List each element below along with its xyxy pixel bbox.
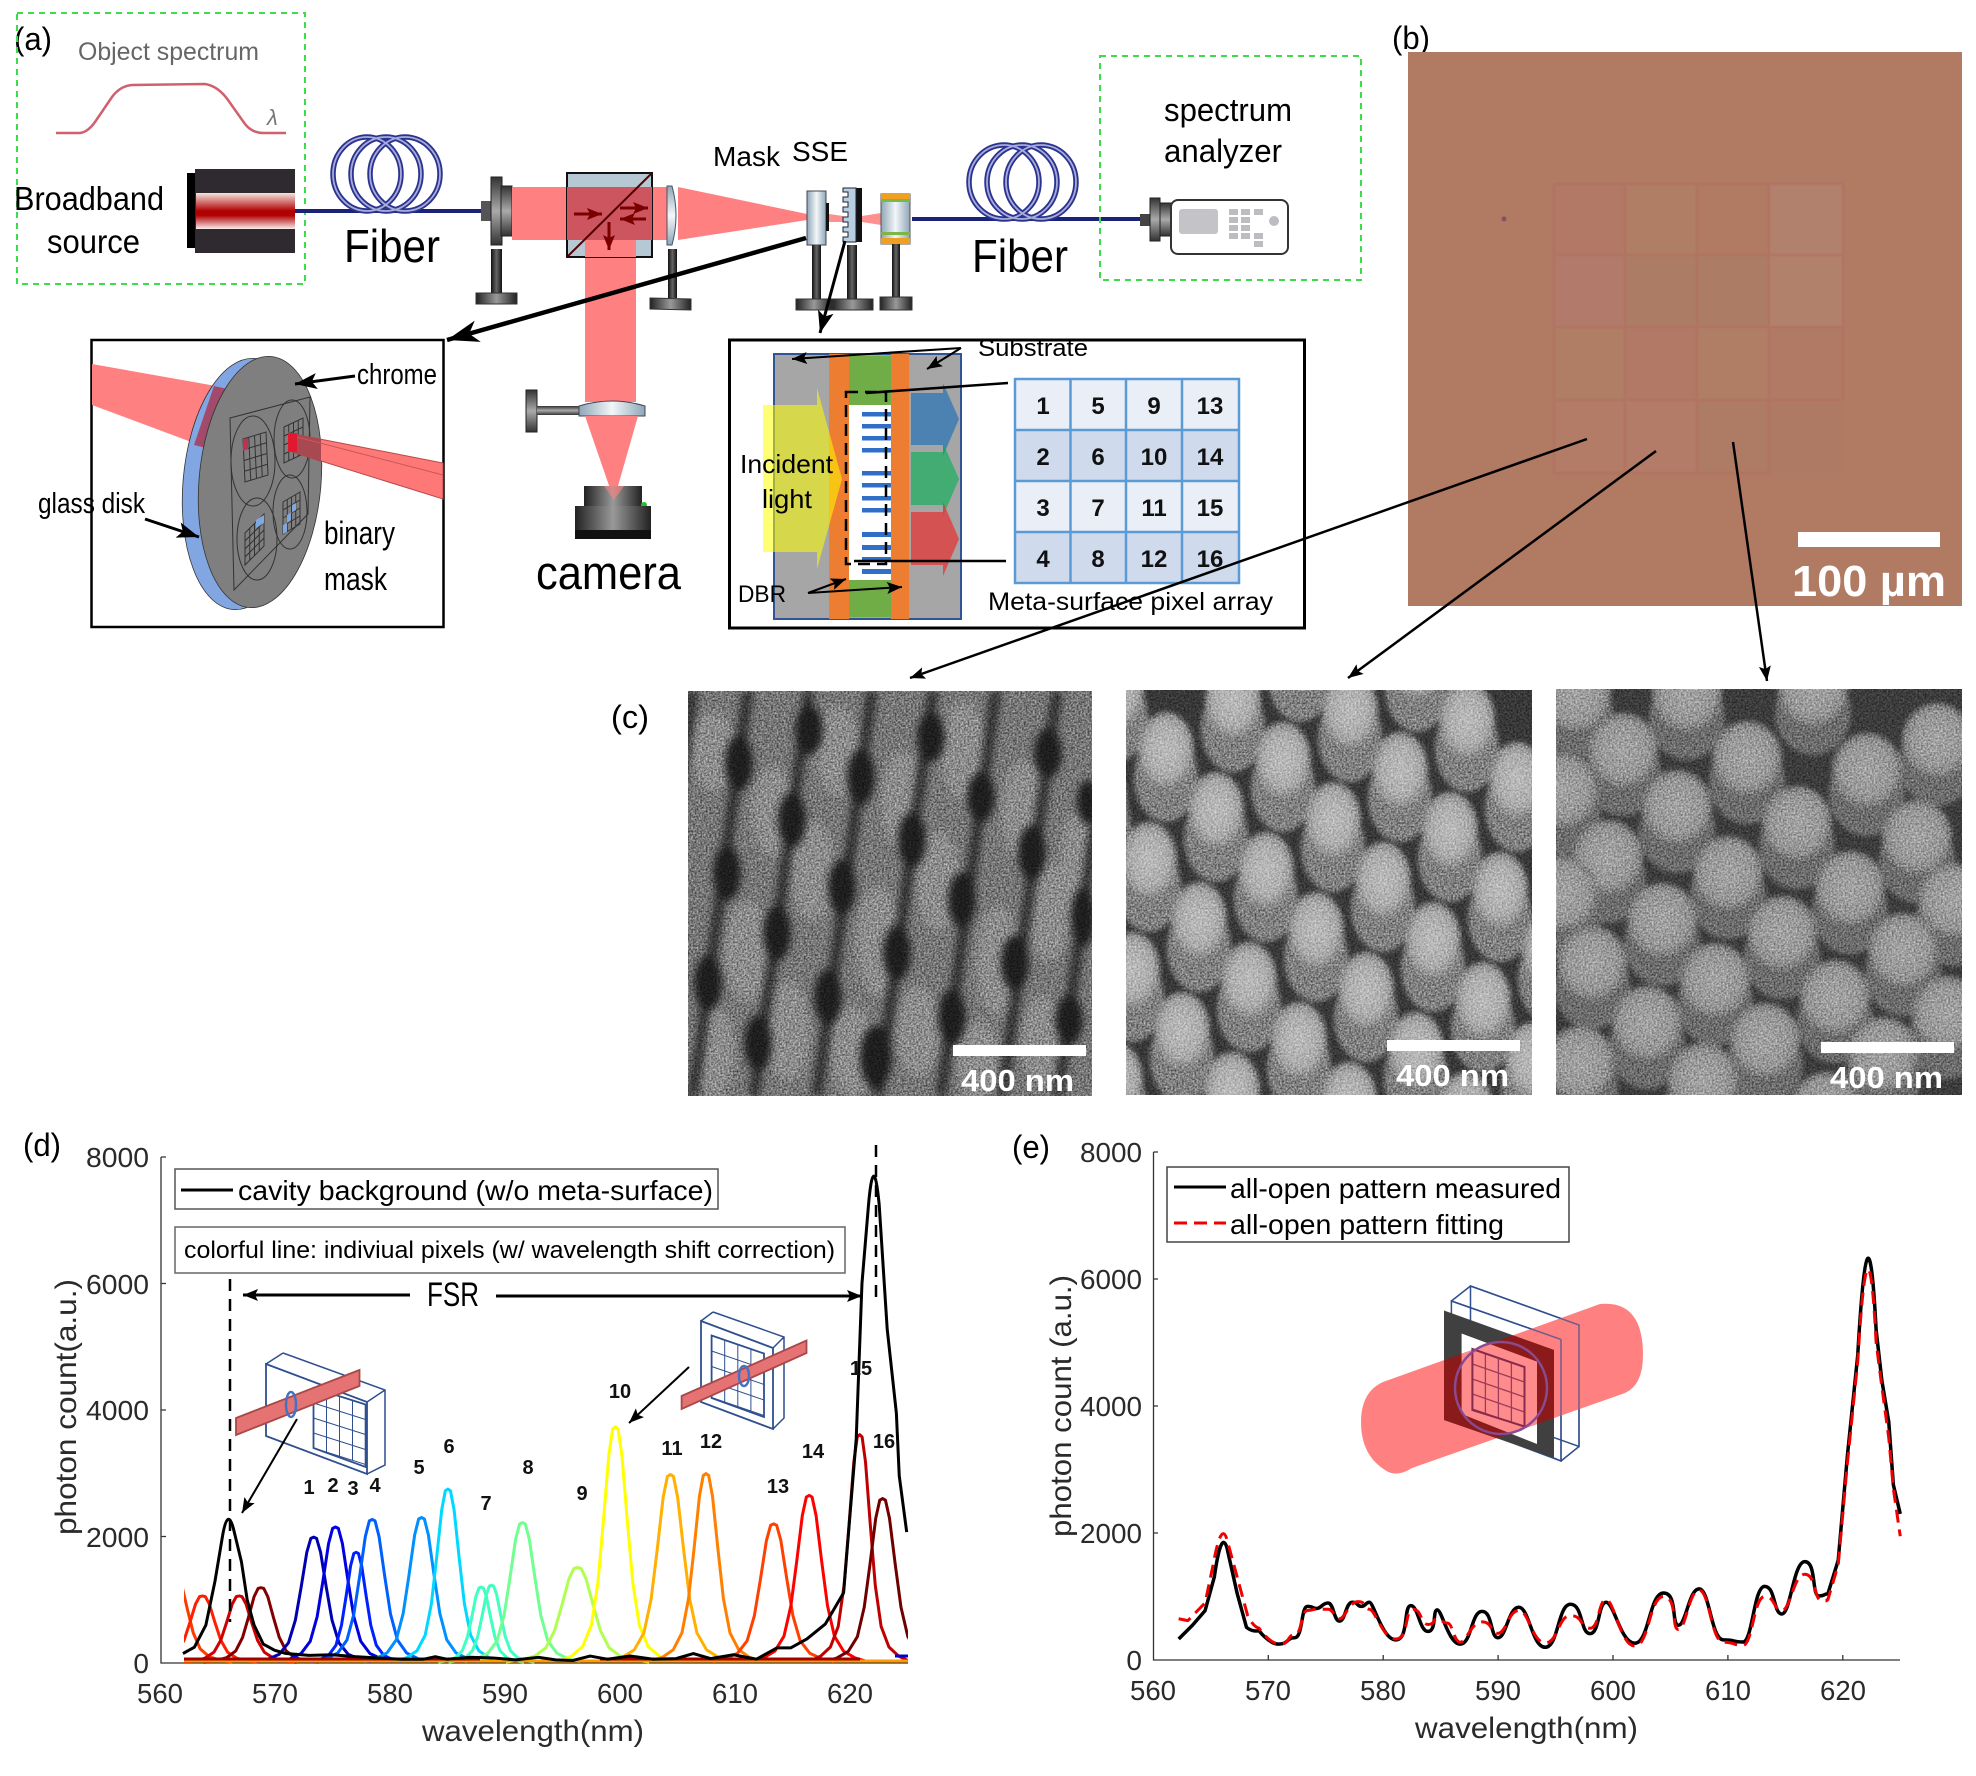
collimator xyxy=(476,177,517,304)
y tick labels xyxy=(1080,1137,1142,1676)
beam: vertical red xyxy=(585,240,636,402)
pixel number labels: 14 xyxy=(802,1441,825,1463)
incident light arrow xyxy=(763,388,842,569)
scale bar 3 xyxy=(1821,1042,1954,1053)
label (a): (a) xyxy=(14,21,52,57)
mask label: Mask xyxy=(713,141,781,172)
x tick labels: 610 xyxy=(712,1678,758,1709)
pixel number table: 8 xyxy=(1091,546,1105,573)
arrow: SSE to cavity inset xyxy=(820,241,845,333)
camera lens xyxy=(526,390,645,432)
x tick labels: 620 xyxy=(827,1678,873,1709)
inset frame xyxy=(730,340,1304,628)
spectrum label: spectrum xyxy=(1164,92,1292,128)
transmitted blue arrow xyxy=(911,383,959,456)
pixel number table: 13 xyxy=(1197,393,1223,420)
icon: all-open cavity with beam xyxy=(1361,1286,1643,1474)
legend: colourful line: colorful line: indiviual pixels (w/ wavelength shift correction) xyxy=(184,1237,835,1264)
icon: light source xyxy=(187,169,295,253)
beam splitter cube xyxy=(567,173,652,257)
broadband source text: Broadband xyxy=(14,180,164,217)
x tick labels xyxy=(137,1678,873,1709)
object spectrum curve xyxy=(56,84,286,133)
mask holder xyxy=(796,191,832,310)
x tick labels: 560 xyxy=(137,1678,183,1709)
glass disk xyxy=(172,353,316,615)
y tick labels: 4000 xyxy=(1080,1391,1142,1422)
SEM image 1 xyxy=(688,691,1092,1096)
zoom dashed region xyxy=(846,392,886,564)
incident label: Incident xyxy=(740,449,834,479)
y tick labels: 0 xyxy=(1126,1645,1142,1676)
y tick labels: 6000 xyxy=(86,1269,149,1300)
incident beam in inset xyxy=(92,364,216,443)
beam: converging to mask xyxy=(678,187,807,240)
x axis title: wavelength(nm) xyxy=(421,1715,644,1748)
pixel number table: 9 xyxy=(1147,393,1161,420)
pixel number table: 2 xyxy=(1036,444,1050,471)
mask patterns xyxy=(230,397,310,590)
pixel number table: 15 xyxy=(1197,495,1223,522)
pixel number labels: 9 xyxy=(576,1483,588,1505)
x tick labels: 620 xyxy=(1820,1675,1866,1706)
arrow: glass disk xyxy=(145,519,199,537)
connector lines to table xyxy=(854,383,1008,561)
pixel number labels: 10 xyxy=(609,1381,631,1403)
x tick labels: 600 xyxy=(1590,1675,1636,1706)
pixel number labels: 15 xyxy=(850,1358,872,1380)
x tick labels: 600 xyxy=(597,1678,643,1709)
pixel number labels: 2 xyxy=(327,1475,339,1497)
meta-surface bars xyxy=(862,412,891,574)
chart axes xyxy=(1154,1152,1900,1660)
lambda symbol: λ xyxy=(266,105,278,130)
pixel number table: 16 xyxy=(1197,546,1223,573)
fiber coil 1 xyxy=(295,137,482,211)
legend: all-open pattern fitting xyxy=(1230,1209,1504,1240)
mask label: mask xyxy=(324,561,388,597)
pixel number labels: 11 xyxy=(661,1438,683,1460)
scale label: 100 µm xyxy=(1792,557,1946,606)
pixel number table xyxy=(1015,379,1239,583)
arrow: pixel to SEM 1 xyxy=(910,439,1587,678)
panel: (d) individual pixel spectra xyxy=(23,1127,940,1748)
substrate arrows xyxy=(792,348,961,369)
camera label: camera xyxy=(536,546,682,599)
lens 1 and post xyxy=(650,186,691,310)
y axis title: photon count (a.u.) xyxy=(1045,1275,1078,1537)
DBR mirrors xyxy=(829,354,909,619)
y tick labels: 4000 xyxy=(86,1395,149,1426)
output collimator xyxy=(880,194,912,310)
x tick labels: 590 xyxy=(1475,1675,1521,1706)
x tick labels: 610 xyxy=(1705,1675,1751,1706)
legend: cavity background: cavity background (w/o meta-surface) xyxy=(238,1175,713,1206)
pixel number table: 6 xyxy=(1091,444,1105,471)
y tick labels xyxy=(86,1142,149,1679)
pixel number labels: 1 xyxy=(303,1477,315,1499)
panel: (a) optical setup xyxy=(14,13,1361,628)
scale label 3: 400 nm xyxy=(1830,1060,1943,1095)
y tick labels: 8000 xyxy=(1080,1137,1142,1168)
object spectrum label: Object spectrum xyxy=(78,38,259,66)
x tick labels: 570 xyxy=(1245,1675,1291,1706)
peak markers: dashed lines xyxy=(230,1145,876,1622)
output beam in inset xyxy=(288,433,443,499)
microscope photo background xyxy=(1408,52,1962,606)
scale bar 1 xyxy=(953,1045,1086,1056)
y axis title: photon count(a.u.) xyxy=(50,1279,83,1535)
pixel number labels: 7 xyxy=(480,1493,492,1515)
chart axes xyxy=(161,1157,908,1663)
fiber label right: Fiber xyxy=(972,230,1068,282)
pixel number table: 5 xyxy=(1091,393,1105,420)
x tick labels: 580 xyxy=(367,1678,413,1709)
transmitted red arrow xyxy=(911,502,959,576)
arrow: pixel to SEM 2 xyxy=(1348,451,1656,678)
panel: (e) all-open pattern spectrum xyxy=(1012,1129,1900,1745)
fiber coil 2 xyxy=(912,145,1140,219)
legend: all-open pattern measured xyxy=(1230,1173,1561,1204)
x axis title: wavelength(nm) xyxy=(1414,1712,1638,1745)
pixel number labels: 3 xyxy=(347,1478,359,1500)
pixel number labels: 12 xyxy=(700,1431,722,1453)
SEM image 2 xyxy=(1126,690,1532,1095)
label (c): (c) xyxy=(611,699,649,735)
arrow: icon to peak 10 xyxy=(629,1367,689,1423)
y tick labels: 2000 xyxy=(86,1522,149,1553)
y tick labels: 6000 xyxy=(1080,1264,1142,1295)
chrome disk xyxy=(188,351,332,613)
pixel number table: 1 xyxy=(1036,393,1050,420)
scale label 1: 400 nm xyxy=(961,1063,1074,1098)
substrate label: Substrate xyxy=(978,335,1088,362)
arrow: pixel to SEM 3 xyxy=(1733,442,1767,681)
x tick labels xyxy=(1130,1675,1866,1706)
label (e): (e) xyxy=(1012,1129,1050,1165)
beam overlap on glass xyxy=(194,386,232,449)
scale bar 2 xyxy=(1387,1040,1520,1051)
pixel number labels: 13 xyxy=(767,1476,789,1498)
panel: (b) microscope image xyxy=(1392,20,1962,606)
cavity spacer xyxy=(849,356,891,617)
inset: binary mask xyxy=(38,340,444,627)
pixel array tints xyxy=(1502,184,1843,473)
pixel number table: 14 xyxy=(1197,444,1224,471)
pixel number labels: 6 xyxy=(443,1436,455,1458)
chart: measured black line xyxy=(1179,1258,1900,1647)
pixel number table: 7 xyxy=(1091,495,1105,522)
chart: fitting red dashed line xyxy=(1179,1269,1900,1646)
pixel number labels: 4 xyxy=(369,1475,381,1497)
fiber label left: Fiber xyxy=(344,220,440,272)
substrate block xyxy=(774,354,961,619)
x tick labels: 580 xyxy=(1360,1675,1406,1706)
FSR arrows xyxy=(243,1295,862,1296)
transmitted green arrow xyxy=(911,443,959,516)
arrow: to mask inset xyxy=(447,238,806,340)
label (d): (d) xyxy=(23,1127,61,1163)
label (b): (b) xyxy=(1392,20,1430,56)
x tick labels: 560 xyxy=(1130,1675,1176,1706)
scale bar xyxy=(1798,532,1940,547)
x tick labels: 590 xyxy=(482,1678,528,1709)
output dashed box xyxy=(1100,56,1361,280)
pixel number table: 4 xyxy=(1036,546,1050,573)
SSE comb element xyxy=(832,188,873,310)
pixel number labels xyxy=(303,1358,895,1515)
inset: SSE cavity xyxy=(730,335,1304,628)
SEM image 3 xyxy=(1556,689,1962,1095)
pixel number labels: 16 xyxy=(873,1431,895,1453)
beam: mask to SSE stub xyxy=(829,213,881,225)
pixel number table: 10 xyxy=(1141,444,1167,471)
legend xyxy=(1167,1167,1569,1242)
y tick labels: 8000 xyxy=(86,1142,149,1173)
chrome label: chrome xyxy=(357,359,437,391)
pixel number table: 11 xyxy=(1141,495,1167,522)
camera body xyxy=(575,486,651,539)
pixel number table: 3 xyxy=(1036,495,1050,522)
beam: converging to camera xyxy=(585,416,638,500)
light label: light xyxy=(762,484,813,514)
beam: horizontal red xyxy=(512,187,670,240)
panel: (c) SEM images xyxy=(611,612,1976,1182)
glass disk label: glass disk xyxy=(38,488,145,520)
pixel number table: 12 xyxy=(1141,546,1167,573)
FSR label: FSR xyxy=(427,1276,479,1314)
SSE label: SSE xyxy=(792,136,848,167)
icon: off-resonance cavity left xyxy=(236,1353,385,1474)
DBR label: DBR xyxy=(738,581,786,608)
arrow: icon to background peak xyxy=(242,1419,297,1513)
pixel number labels: 5 xyxy=(413,1457,425,1479)
analyzer label: analyzer xyxy=(1164,133,1282,169)
legend: colourful line xyxy=(175,1227,845,1273)
x tick labels: 570 xyxy=(252,1678,298,1709)
inset frame xyxy=(92,340,444,627)
pixel number labels: 8 xyxy=(522,1457,534,1479)
legend: cavity background xyxy=(175,1169,718,1209)
input dashed box xyxy=(17,13,305,284)
icon: on-resonance cavity right xyxy=(682,1312,806,1429)
chart: coloured pixel spectra xyxy=(184,1425,908,1664)
binary label: binary xyxy=(324,515,395,551)
DBR arrows xyxy=(808,579,902,593)
scale label 2: 400 nm xyxy=(1396,1058,1509,1093)
chart: black cavity background xyxy=(183,1176,907,1660)
open mask pixels xyxy=(243,438,296,534)
icon: spectrum analyzer device xyxy=(1140,198,1288,254)
source text: source xyxy=(47,223,140,260)
y tick labels: 2000 xyxy=(1080,1518,1142,1549)
y tick labels: 0 xyxy=(133,1648,149,1679)
arrow: chrome xyxy=(295,376,355,384)
table caption: Meta-surface pixel array xyxy=(988,588,1274,616)
